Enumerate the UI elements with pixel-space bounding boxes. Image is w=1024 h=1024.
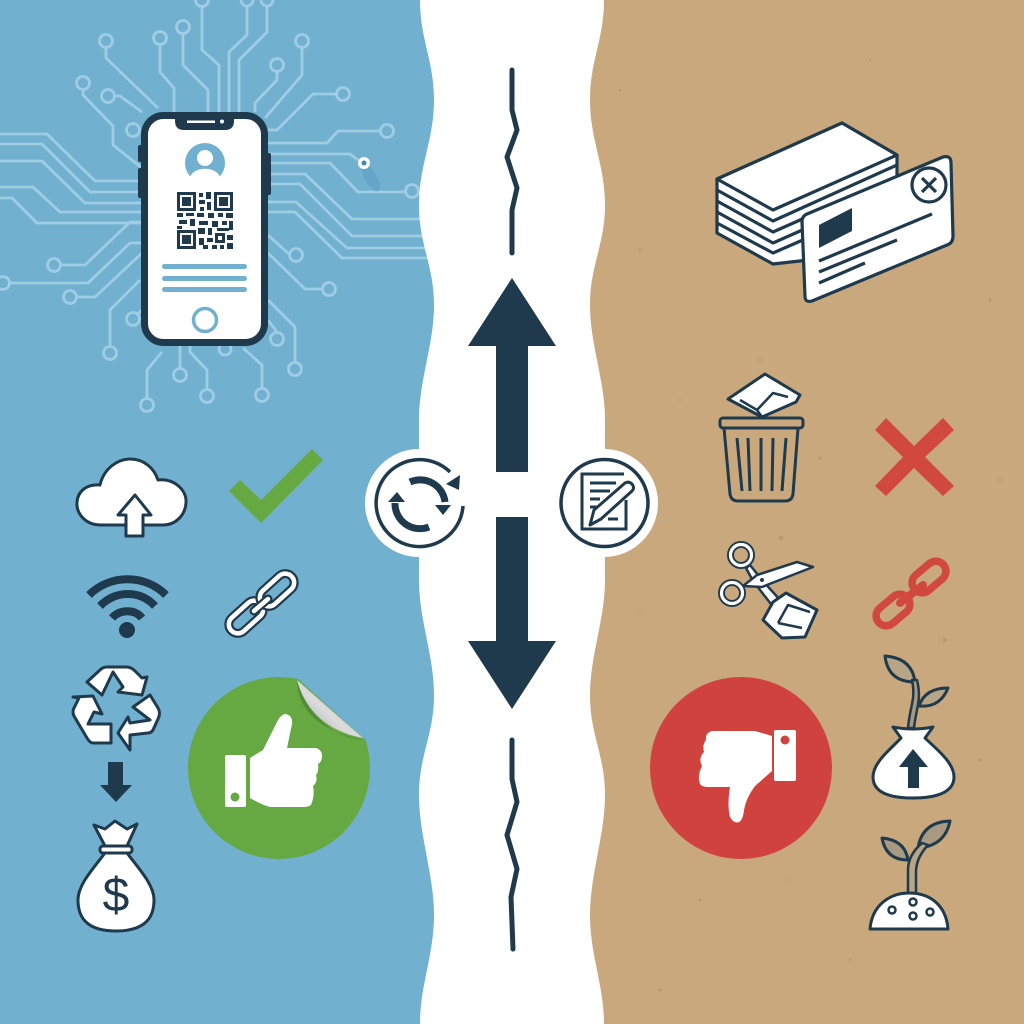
icon: sprout in soil [870, 821, 950, 929]
icon: red cross [875, 418, 954, 496]
icon: down arrow [100, 762, 132, 802]
sticker: red thumbs down [650, 677, 832, 859]
bottom crack line [507, 740, 517, 949]
panel: digital blue background [0, 0, 450, 1024]
arrow up [468, 278, 556, 472]
circuit traces [0, 0, 430, 412]
phone notch [175, 116, 234, 130]
icon: recycling arrows [73, 667, 160, 750]
icon: cloud upload [77, 459, 186, 536]
text lines [162, 264, 247, 292]
icon: trash bin with crumpled paper [720, 374, 803, 501]
home button [194, 308, 216, 332]
panel: central white wavy band [419, 0, 605, 1024]
profile avatar [185, 143, 225, 185]
icon: money bag with dollar [78, 821, 154, 931]
icon: scissors cutting paper [722, 544, 817, 638]
thumbs up hand [225, 714, 322, 807]
icon: smartphone with QR code [138, 116, 271, 342]
icon: wifi signal [89, 579, 166, 638]
badge: refresh sync icon [365, 449, 473, 557]
panel: paper tan background [570, 0, 1024, 1024]
thumbs down hand [699, 730, 796, 822]
badge: document with pencil icon [550, 449, 658, 557]
arrow down [468, 517, 556, 709]
icon: green check mark [229, 449, 323, 523]
QR code [177, 192, 233, 249]
rejected card [802, 157, 953, 301]
icon: red chain link [872, 557, 950, 630]
icon: white chain link [225, 570, 298, 637]
icon: money bag with dollar: $ [103, 869, 129, 922]
phone speaker [187, 120, 224, 124]
icon: plant growing from bag [873, 656, 954, 798]
sticker: green thumbs up [188, 670, 380, 859]
icon: paper stack with rejected card [717, 123, 953, 301]
top crack line [507, 70, 517, 253]
icon: small glowing node [358, 157, 384, 194]
